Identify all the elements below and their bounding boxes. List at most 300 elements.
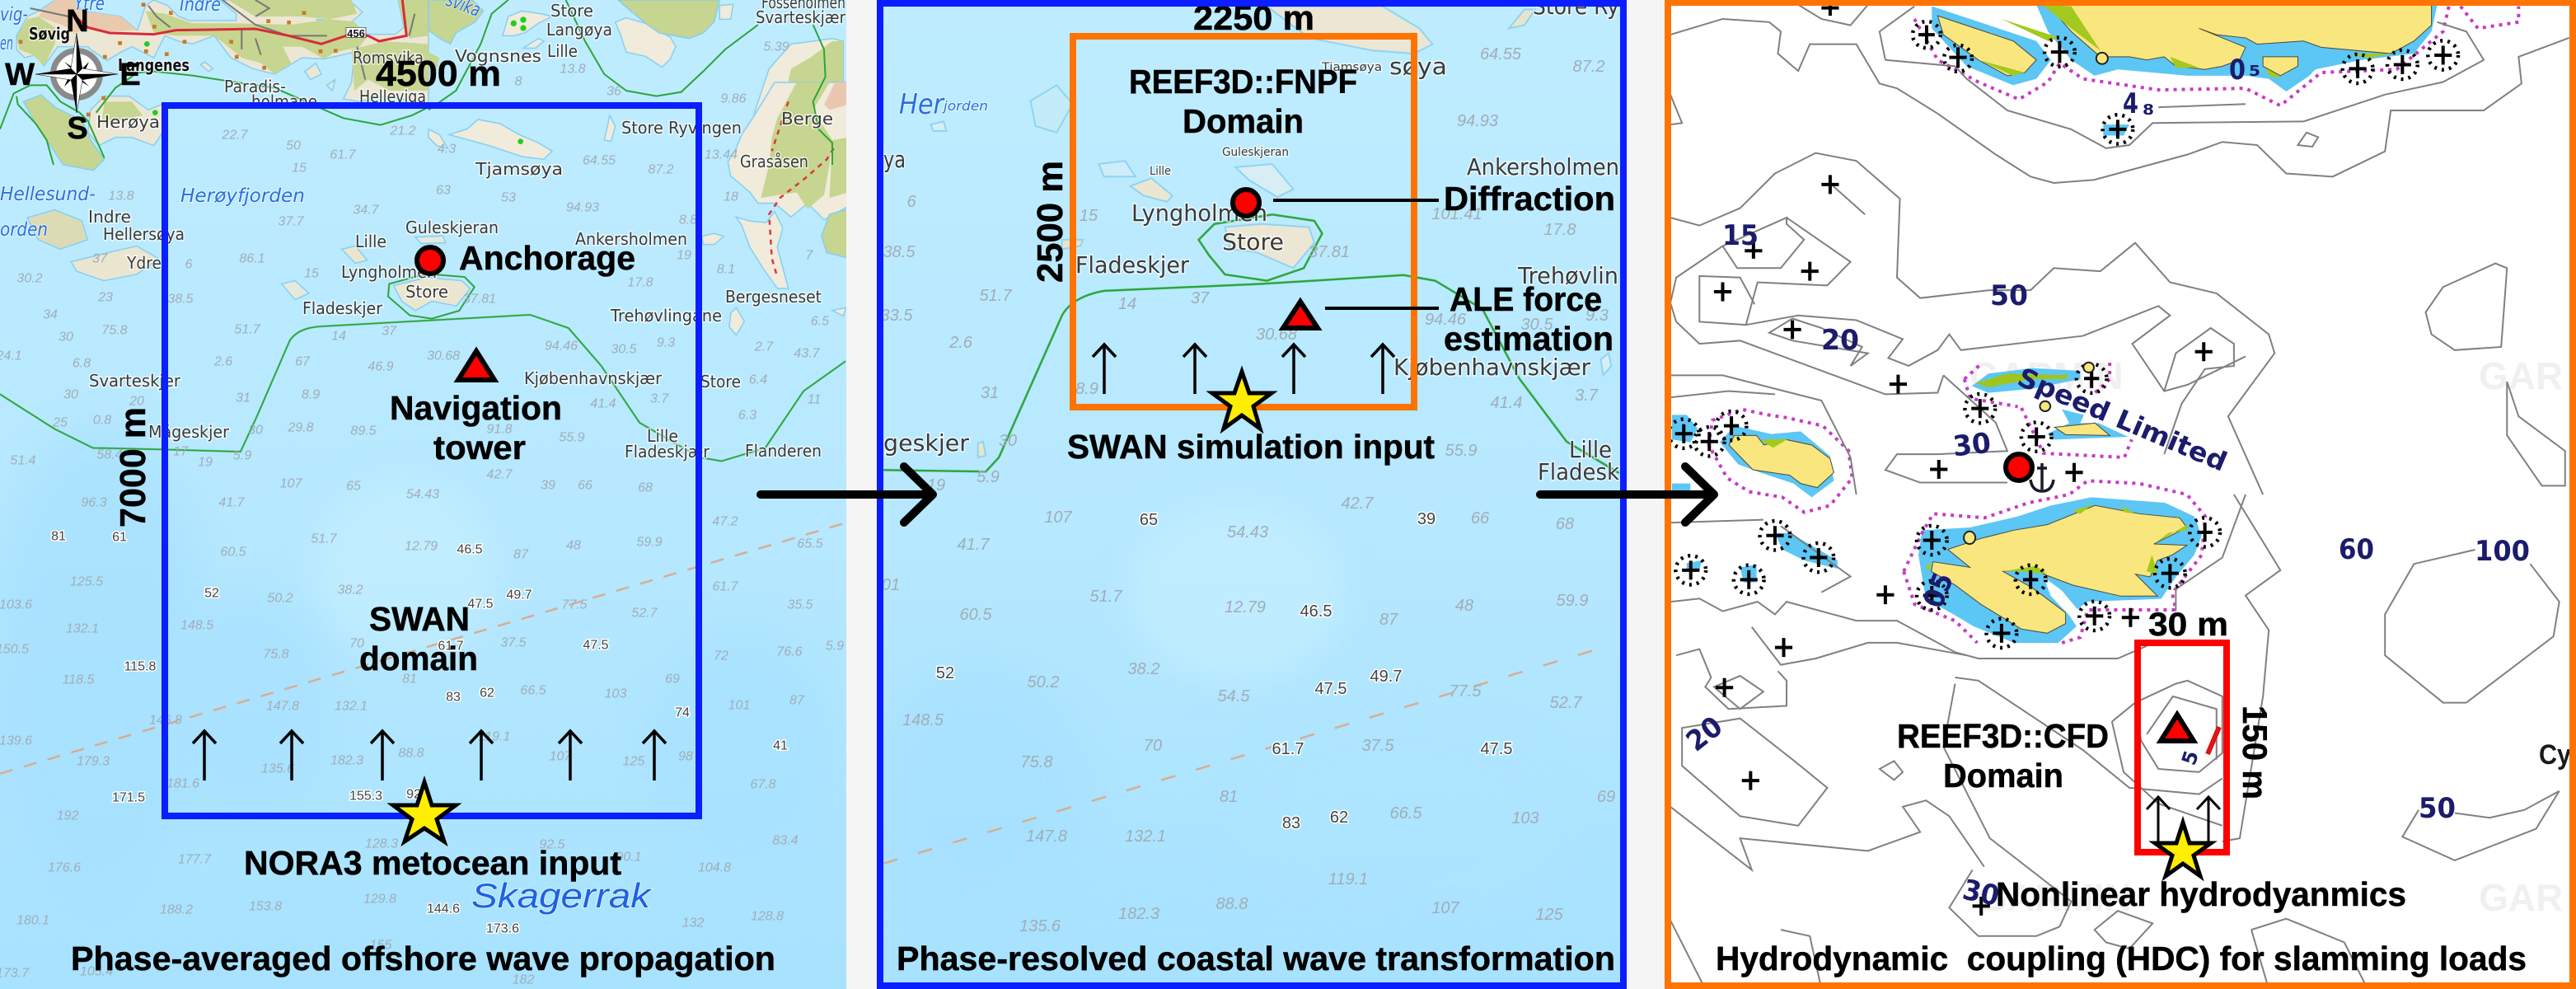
map place names: Svarteskjær (756, 7, 846, 27)
heading: phase-resolved: Phase-resolved coastal wave transformation (897, 940, 1615, 977)
chart soundings and labels: 100 (2475, 535, 2530, 568)
panel: coastal FNPF map (873, 0, 1627, 989)
icon: compass rose: N (66, 4, 89, 39)
chart soundings and labels: 20 (1821, 324, 1859, 357)
label: 30 m: 30 m (2148, 607, 2228, 643)
label: REEF3D FNPF domain: Domain (1183, 102, 1304, 140)
wave direction arrows (1093, 345, 1394, 394)
map dark depth soundings: 47.5 (583, 638, 609, 653)
map faint depth soundings: 30 (59, 330, 73, 345)
panel border (1668, 2, 2573, 986)
label: Navigation tower (392, 395, 560, 460)
map place names: Vognsnes (455, 46, 541, 66)
map faint depth soundings: 135.6 (261, 762, 294, 776)
map faint depth soundings: 132 (682, 916, 704, 930)
map faint depth soundings: 20 (129, 394, 144, 409)
map place names: Hellesund- (0, 184, 96, 205)
chart soundings and labels: 60 (2339, 533, 2374, 566)
map faint depth soundings: 53 (501, 191, 516, 204)
label: 2500 m: 2500 m (1030, 161, 1070, 283)
map faint depth soundings: 81 (402, 673, 417, 686)
chart soundings and labels: 15 (1722, 219, 1759, 252)
map faint depth soundings: 50.2 (1028, 673, 1059, 691)
chart soundings and labels (1680, 54, 2571, 913)
map faint depth soundings: 8.8 (679, 213, 697, 227)
map faint depth soundings: 67 (295, 354, 311, 369)
map faint depth soundings: 128.3 (365, 837, 398, 851)
map faint depth soundings: 101 (728, 699, 750, 712)
chart upper islands (1932, 5, 2438, 136)
map faint depth soundings: 104.8 (698, 860, 731, 875)
map faint depth soundings: 70 (1144, 737, 1162, 755)
map place names: Paradis- (224, 77, 286, 96)
map dark depth soundings: 61.7 (438, 640, 464, 653)
map faint depth soundings: 176.6 (48, 860, 81, 875)
map faint depth soundings: 77.5 (561, 598, 588, 612)
map small islands (27, 209, 470, 311)
map faint depth soundings: 43.7 (794, 346, 821, 361)
map faint depth soundings: 177.7 (178, 852, 212, 867)
map faint depth soundings: 92.5 (539, 837, 565, 852)
map place names: Ankersholmen (575, 229, 687, 249)
map dark depth soundings: 52 (936, 664, 954, 682)
map faint depth soundings: 25 (52, 415, 68, 430)
map place names: Ankersholmen (1467, 153, 1619, 180)
map faint depth soundings: 14 (331, 330, 346, 343)
chart soundings and labels: 5 (2249, 63, 2260, 80)
chart rock symbols upper (1669, 2, 2458, 482)
watermark (1969, 354, 2563, 919)
map faint depth soundings: 87.2 (1573, 58, 1604, 76)
map faint depth soundings: 75.8 (263, 648, 289, 661)
map faint depth soundings: 89.5 (350, 424, 377, 438)
map place names: Hellersøya (103, 224, 185, 244)
map place names: Lyngholmen (341, 262, 437, 282)
map faint depth soundings: 2.6 (948, 334, 973, 352)
map faint depth soundings: 15 (304, 267, 319, 280)
map faint depth soundings: 148.5 (902, 711, 944, 729)
map faint depth soundings: 6.4 (749, 373, 767, 387)
map place names: Fladesk (1538, 458, 1620, 485)
map dark depth soundings: 155.3 (349, 790, 382, 803)
map faint depth soundings: 52.7 (631, 607, 658, 620)
map faint depth soundings: 129.8 (363, 892, 396, 907)
map dark depth soundings: 47.5 (1481, 740, 1512, 758)
map faint depth soundings: 103 (605, 687, 626, 701)
map dark depth soundings: 62 (1330, 809, 1348, 827)
map faint depth soundings: 180.1 (16, 913, 49, 928)
label: Nonlinear hydrodyanmics: Nonlinear hydrodyanmics (1996, 875, 2406, 913)
map faint depth soundings: 75.8 (101, 323, 128, 338)
map faint depth soundings: 51.7 (980, 287, 1012, 305)
map dark depth soundings: 49.7 (1370, 668, 1402, 686)
map faint depth soundings: 64.55 (1480, 45, 1522, 63)
map faint depth soundings: 17.8 (1544, 221, 1576, 239)
map faint depth soundings: 98 (678, 750, 693, 763)
map faint depth soundings: 5.39 (763, 40, 789, 54)
heading: phase-averaged: Phase-averaged offshore wave propagation (71, 940, 775, 977)
map faint depth soundings: 6 (185, 257, 193, 272)
leader line: diffraction (1273, 199, 1439, 202)
map faint depth soundings: 182 (513, 973, 534, 987)
map faint depth soundings: 33.5 (881, 307, 913, 325)
map place names: jorden (942, 98, 988, 114)
map faint depth soundings: 3.7 (1575, 387, 1599, 405)
map place names: geskjer (883, 429, 969, 457)
map dark depth soundings: 92 (406, 788, 421, 801)
map faint depth soundings: 182.3 (1118, 905, 1159, 923)
map faint depth soundings: 18 (724, 190, 738, 204)
map dark depth soundings: 47.5 (467, 597, 494, 612)
map place names: Lille (1569, 436, 1612, 463)
map faint depth soundings: 125 (623, 755, 644, 768)
map place names: vig- (0, 4, 28, 26)
map place names: Fladeskjær (625, 442, 710, 462)
map faint depth soundings: 54.5 (1218, 687, 1250, 705)
map dark depth soundings: 115.8 (124, 659, 157, 674)
map place names: Store (550, 1, 593, 21)
map place names: Lyngholmen (1131, 199, 1267, 227)
label: REEF3D CFD domain: Domain (1943, 757, 2063, 794)
map faint depth soundings: 29.8 (287, 420, 314, 435)
map faint depth soundings: 105.4 (80, 964, 113, 979)
map faint depth soundings: 87.2 (648, 163, 674, 176)
map faint depth soundings: 8.9 (1075, 380, 1098, 398)
map north-east islands (429, 0, 843, 165)
chart soundings and labels: 30 (1951, 427, 1993, 463)
label: Navigation tower: Navigation (390, 389, 562, 427)
map faint depth soundings: 64.55 (583, 153, 616, 168)
map faint depth soundings: 66.5 (520, 684, 546, 697)
map faint depth soundings: 87 (513, 547, 529, 562)
map faint depth soundings: 8 (515, 74, 522, 89)
map faint depth soundings: 155 (370, 938, 391, 953)
map faint depth soundings: 107 (1431, 899, 1460, 917)
map faint depth soundings: 50 (286, 138, 301, 153)
map faint depth soundings: 125 (1535, 906, 1564, 924)
chart mid islands (1672, 368, 2202, 643)
map place names: Søvig (29, 24, 70, 44)
map faint depth soundings: 68 (638, 481, 653, 494)
map faint depth soundings: 14 (1118, 295, 1136, 313)
map faint depth soundings: 103 (1511, 809, 1539, 827)
map faint depth soundings: 7 (806, 249, 814, 262)
map place names: Tjamsøya (1321, 61, 1382, 74)
chart depth contours lower (1665, 494, 2560, 989)
map faint depth soundings: 107 (280, 476, 302, 491)
map faint depth soundings: 30 (63, 387, 78, 402)
map place names: Langøya (546, 20, 612, 40)
watermark: GARMIN (1969, 354, 2124, 397)
road number 456: 456 (347, 27, 365, 40)
map faint depth soundings: 103.6 (0, 598, 32, 612)
map faint depth soundings: 119.1 (479, 730, 510, 743)
label: SWAN domain: domain (359, 640, 478, 677)
map faint depth soundings: 132.1 (335, 699, 368, 714)
map faint depth soundings: 55.9 (559, 430, 585, 445)
map faint depth soundings: 47.2 (712, 514, 738, 529)
map faint depth soundings: 37.5 (1362, 737, 1394, 755)
map faint depth soundings: 42.7 (1342, 494, 1374, 513)
label: REEF3D FNPF domain: REEF3D::FNPF (1129, 63, 1357, 101)
map faint depth soundings: 37.81 (463, 292, 496, 307)
map faint depth soundings: 42.7 (486, 468, 513, 481)
chart soundings and labels: 4 (2123, 87, 2138, 120)
map dark depth soundings: 61.7 (1272, 740, 1304, 758)
map faint depth soundings: 69 (1597, 788, 1615, 806)
map faint depth soundings: 21.2 (389, 124, 416, 138)
label: REEF3D FNPF domain (1129, 63, 1357, 140)
map faint depth soundings: 37.7 (278, 214, 305, 229)
map northern mainland (16, 0, 429, 171)
map faint depth soundings: 58.4 (96, 448, 123, 462)
map faint depth soundings: 37 (382, 325, 397, 338)
map place names: Lille (355, 232, 386, 251)
chart soundings and labels: 5 (2177, 748, 2204, 768)
map faint depth soundings: 38.2 (337, 584, 363, 597)
map place names: søya (1389, 53, 1447, 80)
chart magenta boundaries (1709, 7, 2518, 643)
label: 4500 m: 4500 m (376, 54, 501, 94)
map faint depth soundings: 2.7 (754, 340, 774, 354)
map faint depth soundings: 6.8 (73, 356, 91, 371)
map faint depth soundings: 86.1 (239, 252, 265, 265)
map faint depth soundings: 55.9 (1445, 442, 1477, 460)
map place names: Romsvika (353, 48, 424, 68)
map dark depth soundings: 74 (675, 705, 690, 720)
map place names: Kjøbenhavnskjær (524, 368, 663, 388)
map place names: holmane (251, 91, 317, 111)
map faint depth soundings: 31 (981, 384, 999, 402)
map faint depth soundings: 6.5 (811, 315, 829, 328)
map faint depth soundings: 67.8 (750, 778, 776, 791)
panel: offshore SWAN map (0, 0, 849, 989)
map faint depth soundings: 30 (999, 432, 1017, 450)
map faint depth soundings: 17.8 (627, 275, 653, 290)
map faint depth soundings: 35.5 (787, 598, 813, 612)
map faint depth soundings: 41.7 (218, 496, 246, 509)
icon: anchor (2030, 463, 2054, 491)
map faint depth soundings: 59.9 (636, 536, 663, 549)
map place names: Indre (88, 207, 131, 227)
map place names: Store (405, 282, 448, 302)
map faint depth soundings: 68 (1556, 515, 1574, 533)
map faint depth soundings: 0.8 (93, 414, 111, 427)
map place names: Herøya (96, 112, 160, 132)
map faint depth soundings: 5.9 (977, 468, 1000, 486)
map faint depth soundings: 147.8 (266, 699, 299, 714)
map place names: Lille (647, 426, 678, 446)
map faint depth soundings: 76.6 (776, 644, 803, 659)
map green coastal routes (883, 214, 1619, 473)
map faint depth soundings: 60.5 (960, 606, 992, 624)
marker: navigation tower (2161, 715, 2194, 741)
map faint depth soundings: 61.7 (330, 148, 357, 162)
map faint depth soundings: 66.5 (1390, 804, 1422, 823)
map faint depth soundings: 19 (677, 249, 691, 262)
map faint depth soundings: 01 (882, 576, 900, 594)
map faint depth soundings: 87 (1379, 611, 1398, 629)
map faint depth soundings: 188.2 (160, 903, 193, 916)
map faint depth soundings: 51.4 (10, 453, 36, 468)
map dark depth soundings (51, 529, 788, 936)
map faint depth soundings (0, 40, 844, 987)
map faint depth soundings: 125.5 (70, 575, 103, 588)
label: ALE force estimation: estimation (1444, 320, 1614, 358)
map place names: Bergesneset (725, 287, 822, 307)
icon: input star (2155, 823, 2211, 876)
map faint depth soundings: 5.9 (826, 640, 844, 653)
heading: hydrodynamic coupling: Hydrodynamic coupling (HDC) for slamming loads (1716, 940, 2527, 977)
map faint depth soundings: 51.7 (311, 532, 338, 546)
marker: navigation tower (1283, 302, 1318, 328)
map place names: Guleskjeran (1222, 146, 1289, 159)
map faint depth soundings: 15 (1080, 207, 1098, 225)
label: Navigation tower: tower (433, 429, 526, 466)
map faint depth soundings: 30.5 (611, 343, 637, 356)
map faint depth soundings: 179.3 (77, 755, 110, 768)
map place names: Her (899, 88, 945, 121)
map faint depth soundings: 107 (550, 750, 572, 763)
map faint depth soundings: 38.5 (167, 292, 194, 307)
map faint depth soundings: 37 (92, 252, 108, 265)
map dashed boundary (0, 523, 845, 774)
map dark depth soundings: 61 (112, 531, 127, 544)
map faint depth soundings: 12.79 (1225, 598, 1266, 616)
wave direction arrows (193, 731, 666, 780)
map place names: Grasåsen (740, 152, 808, 171)
map place names: Guleskjeran (405, 218, 499, 237)
map faint depth soundings: 6.3 (738, 409, 756, 422)
map dashed boundary (883, 646, 1609, 864)
map dark depth soundings: 39 (1417, 510, 1436, 528)
map faint depth soundings: 41.4 (1491, 394, 1522, 412)
map faint depth soundings: 88.8 (398, 747, 424, 760)
map dark depth soundings: 65 (1140, 511, 1158, 529)
chart depth contours upper (1670, 5, 2569, 494)
map faint depth soundings: 118.5 (63, 673, 95, 687)
chart background (1665, 0, 2576, 989)
label: SWAN domain (360, 607, 476, 671)
map dark depth soundings: 173.6 (486, 921, 519, 936)
map faint depth soundings: 65 (346, 480, 361, 493)
map dark depth soundings (936, 510, 1512, 832)
map faint depth soundings: 17 (173, 445, 189, 458)
chart soundings and labels: 20 (1680, 710, 1729, 758)
map faint depth soundings: 66 (578, 478, 592, 493)
map faint depth soundings: 63 (436, 183, 451, 198)
map faint depth soundings: 6 (906, 193, 916, 211)
map dark depth soundings: 171.5 (112, 791, 145, 804)
map faint depth soundings: 48 (1455, 597, 1473, 615)
map faint depth soundings: 8.1 (717, 262, 735, 277)
map faint depth soundings: 147.8 (1026, 827, 1067, 846)
map faint depth soundings: 2.6 (213, 354, 232, 369)
map faint depth soundings: 153.8 (249, 900, 282, 913)
map faint depth soundings: 38.2 (1128, 660, 1159, 678)
map faint depth soundings: 41.7 (958, 536, 990, 554)
map faint depth soundings: 13.8 (560, 63, 586, 76)
map place names: Fladeskjer (302, 298, 383, 318)
map faint depth soundings: 9.3 (657, 336, 675, 349)
map faint depth soundings: 38.5 (883, 243, 916, 261)
label: NORA3 metocean input: NORA3 metocean input (244, 844, 621, 882)
map faint depth soundings: 46.9 (368, 359, 394, 374)
map faint depth soundings: 54.43 (1227, 523, 1268, 541)
map faint depth soundings: 30.2 (16, 272, 43, 285)
map faint depth soundings: 30.68 (1256, 326, 1297, 344)
label: SWAN domain: SWAN (369, 600, 470, 638)
map place names: Kjøbenhavnskjær (1393, 354, 1590, 381)
map faint depth soundings: 87 (789, 694, 805, 707)
leader line: ALE force (1325, 307, 1439, 310)
map place names: Herøyfjorden (180, 185, 305, 207)
arrow: panel 1 to panel 2 (761, 466, 933, 523)
map place names: Trehøvlingane (610, 306, 722, 326)
map faint depth soundings: 96.3 (81, 496, 107, 509)
map faint depth soundings: 66 (1471, 509, 1490, 527)
map faint depth soundings: 60.5 (220, 546, 246, 559)
map faint depth soundings: 146.8 (149, 714, 182, 727)
map dark depth soundings: 47.5 (1315, 680, 1347, 698)
map faint depth soundings: 15 (292, 162, 307, 175)
map faint depth soundings: 132.1 (1125, 827, 1166, 846)
map place names: Langenes (118, 55, 190, 75)
map faint depth soundings: 54.43 (406, 488, 439, 501)
map faint depth soundings: 4.3 (438, 142, 456, 157)
map faint depth soundings: 94.93 (1457, 112, 1498, 130)
map faint depth soundings: 11 (808, 392, 821, 407)
map dark depth soundings: 144.6 (427, 902, 460, 916)
chart soundings and labels: 05 (1917, 568, 1960, 612)
map faint depth soundings: 30 (248, 424, 263, 437)
map faint depth soundings: 48 (566, 539, 581, 552)
chart soundings and labels: Speed Limited (2013, 361, 2232, 478)
map dark depth soundings: 83 (446, 691, 461, 704)
map faint depth soundings: 182.3 (330, 753, 363, 768)
map roads (19, 0, 415, 116)
panel: nautical chart CFD (1665, 0, 2576, 989)
map place names: Helleviga (359, 87, 426, 106)
chart soundings and labels: 50 (2419, 792, 2456, 825)
map faint depth soundings: 51.7 (234, 323, 261, 336)
map faint depth soundings (881, 45, 1615, 935)
map faint depth soundings: 9.3 (1585, 307, 1609, 325)
map faint depth soundings: 94.46 (545, 340, 578, 353)
map faint depth soundings: 83.4 (772, 834, 799, 847)
map faint depth soundings: 13.44 (705, 148, 738, 162)
label: Diffraction: Diffraction (1444, 180, 1615, 218)
map faint depth soundings: 81 (1220, 788, 1238, 806)
map place names: Store (700, 372, 741, 391)
map place names: Lille (1150, 165, 1171, 178)
map faint depth soundings: 148.5 (180, 618, 213, 633)
label: REEF3D CFD domain: REEF3D::CFD (1897, 717, 2109, 755)
map place names: ya (883, 146, 906, 173)
map faint depth soundings: 12.79 (405, 539, 438, 554)
map faint depth soundings: 19 (927, 476, 945, 494)
map faint depth soundings: 13.8 (108, 190, 134, 203)
watermark: GAR (2479, 876, 2563, 919)
label: 7000 m: 7000 m (113, 407, 153, 527)
map faint depth soundings: 119.1 (1328, 870, 1368, 888)
marker: anchorage (2006, 454, 2032, 480)
FNPF domain box (1073, 36, 1414, 407)
map faint depth soundings: 139.6 (0, 734, 32, 748)
icon: compass rose: S (67, 111, 88, 146)
icon: input star (1212, 372, 1272, 429)
marker: anchorage (1233, 190, 1259, 216)
